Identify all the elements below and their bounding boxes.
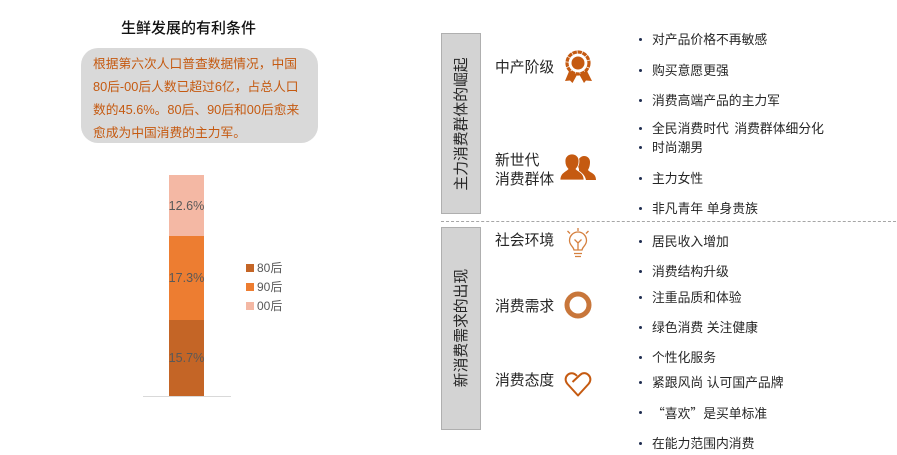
bullet: 注重品质和体验 (652, 290, 742, 305)
bar segment: 90后 (169, 236, 204, 320)
callout: population text: 数的45.6%。80后、90后和00后愈来 (93, 102, 299, 117)
legend item: 90后: 90后 (257, 280, 282, 294)
bar segment: 80后 (169, 320, 204, 396)
label: 新世代消费群体 (495, 152, 554, 188)
legend item: 80后 (246, 261, 282, 275)
side heading: 主力消费群体的崛起: 主力消费群体的崛起 (454, 57, 470, 190)
icon: heart (564, 372, 592, 396)
chart legend (246, 261, 282, 313)
legend item: 80后: 80后 (257, 261, 282, 275)
bullet: 全民消费时代 消费群体细分化 (652, 121, 824, 136)
label: 新世代消费群体: 消费群体 (495, 172, 554, 188)
bullet: “喜欢”是买单标准 (652, 403, 767, 422)
bullet: 消费结构升级 (652, 264, 729, 279)
bullet list: 社会环境 需求 态度 traits (639, 234, 784, 451)
legend item: 00后: 00后 (257, 299, 282, 313)
side heading: 主力消费群体的崛起 (441, 33, 481, 214)
bullet: 非凡青年 单身贵族 (652, 201, 758, 216)
side heading: 新消费需求的出现: 新消费需求的出现 (454, 268, 470, 387)
icon: ring (564, 292, 592, 318)
legend item: 90后 (246, 280, 282, 294)
bullet: 时尚潮男 (652, 140, 703, 155)
label: 社会环境: 社会环境 (495, 233, 554, 249)
callout: population text: 80后-00后人数已超过6亿，占总人口 (93, 79, 298, 94)
bullet: 居民收入增加 (652, 234, 729, 249)
icon: people (560, 154, 596, 180)
bullet: 消费高端产品的主力军 (652, 93, 780, 108)
bullet: 对产品价格不再敏感 (652, 32, 767, 47)
icon: light bulb (567, 228, 589, 258)
label: 消费态度: 消费态度 (495, 373, 554, 389)
label: 消费需求: 消费需求 (495, 299, 554, 315)
label: 中产阶级: 中产阶级 (495, 60, 554, 76)
bullet: 绿色消费 关注健康 (652, 320, 758, 335)
callout: population text: 愈成为中国消费的主力军。 (93, 125, 246, 140)
bullet list: 中产阶级 and 新世代 traits (639, 32, 824, 216)
icon: award ribbon (565, 50, 592, 83)
callout: population text: 根据第六次人口普查数据情况，中国 (93, 56, 297, 71)
bullet: 购买意愿更强 (652, 63, 729, 78)
bar segment: 00后: 12.6% (169, 199, 204, 213)
bar segment: 00后 (169, 175, 204, 236)
bar segment: 90后: 17.3% (169, 271, 204, 285)
stacked bar chart (143, 175, 231, 397)
callout: population text (81, 48, 318, 143)
chart baseline (143, 396, 231, 397)
bullet: 紧跟风尚 认可国产品牌 (652, 375, 784, 390)
bullet: 主力女性 (652, 171, 703, 186)
bullet: 在能力范围内消费 (652, 436, 754, 451)
legend item: 00后 (246, 299, 282, 313)
bar segment: 80后: 15.7% (169, 351, 204, 365)
bullet: 个性化服务 (652, 350, 716, 365)
label: 新世代消费群体: 新世代 (495, 153, 539, 169)
side heading: 新消费需求的出现 (441, 227, 481, 430)
title: 生鲜发展的有利条件 (121, 20, 256, 37)
